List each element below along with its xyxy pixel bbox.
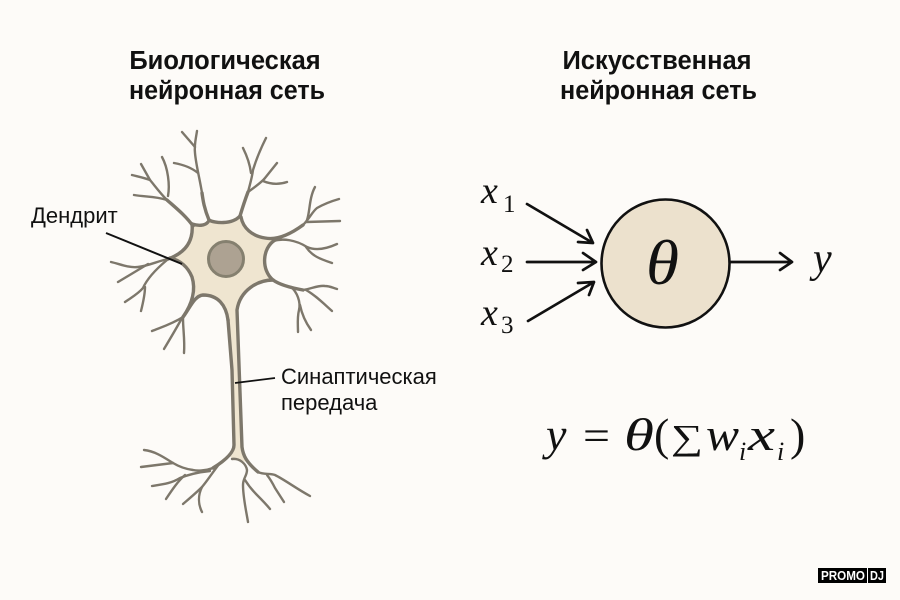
input x1: [480, 170, 516, 218]
arrow: x2 to neuron: [527, 253, 596, 270]
right dendrites: [273, 187, 340, 332]
label: synaptic transmission: Синаптическая: [281, 364, 437, 389]
logo badge: PROMO DJ: PROMO: [821, 568, 865, 583]
arrow: x3 to neuron: [528, 282, 594, 321]
label: dendrite: Дендрит: [31, 203, 118, 228]
upper left dendrites: [132, 157, 169, 200]
heading: biological neural network: Биологическая: [129, 47, 321, 75]
input x1: 1: [503, 191, 516, 218]
input x3: 3: [501, 312, 514, 339]
input x2: [480, 232, 514, 278]
formula: w: [706, 409, 739, 460]
formula: x: [747, 409, 776, 460]
diagram: artificial neuron: [480, 170, 832, 339]
label: synaptic transmission: [235, 364, 437, 415]
heading: artificial neural network: нейронная сеть: [560, 77, 757, 105]
theta symbol: θ: [646, 227, 679, 298]
formula: y: [542, 409, 567, 460]
logo badge: PROMO DJ: DJ: [870, 568, 884, 583]
nucleus: [208, 242, 244, 276]
left dendrites: [111, 259, 184, 353]
label: synaptic transmission: передача: [281, 390, 378, 415]
heading: artificial neural network: Искусственная: [562, 47, 752, 75]
input x3: x: [480, 292, 498, 334]
input x2: 2: [501, 251, 514, 278]
axon terminal dendrites: [141, 450, 310, 522]
top dendrites: [174, 131, 287, 193]
label: dendrite: [31, 203, 182, 264]
formula: =: [583, 414, 610, 460]
formula: i: [739, 437, 746, 466]
output y: y: [809, 236, 832, 282]
arrow: x1 to neuron: [527, 204, 593, 243]
arrow: neuron to y: [730, 253, 792, 270]
formula: (: [654, 409, 669, 460]
heading: biological neural network: нейронная сеть: [129, 77, 325, 105]
formula: ∑: [671, 418, 703, 457]
formula: i: [777, 437, 784, 466]
formula: ): [790, 409, 805, 460]
neuron circle: [602, 200, 730, 328]
heading: artificial neural network: [560, 47, 757, 105]
formula: [542, 409, 805, 466]
input x2: x: [480, 232, 498, 274]
input x3: [480, 292, 514, 339]
heading: biological neural network: [129, 47, 325, 105]
diagram: biological neuron: [111, 131, 340, 522]
neuron body fill: [170, 216, 275, 462]
input x1: x: [480, 170, 498, 212]
formula: θ: [624, 409, 654, 460]
neuron body and axon outline: [167, 192, 303, 472]
